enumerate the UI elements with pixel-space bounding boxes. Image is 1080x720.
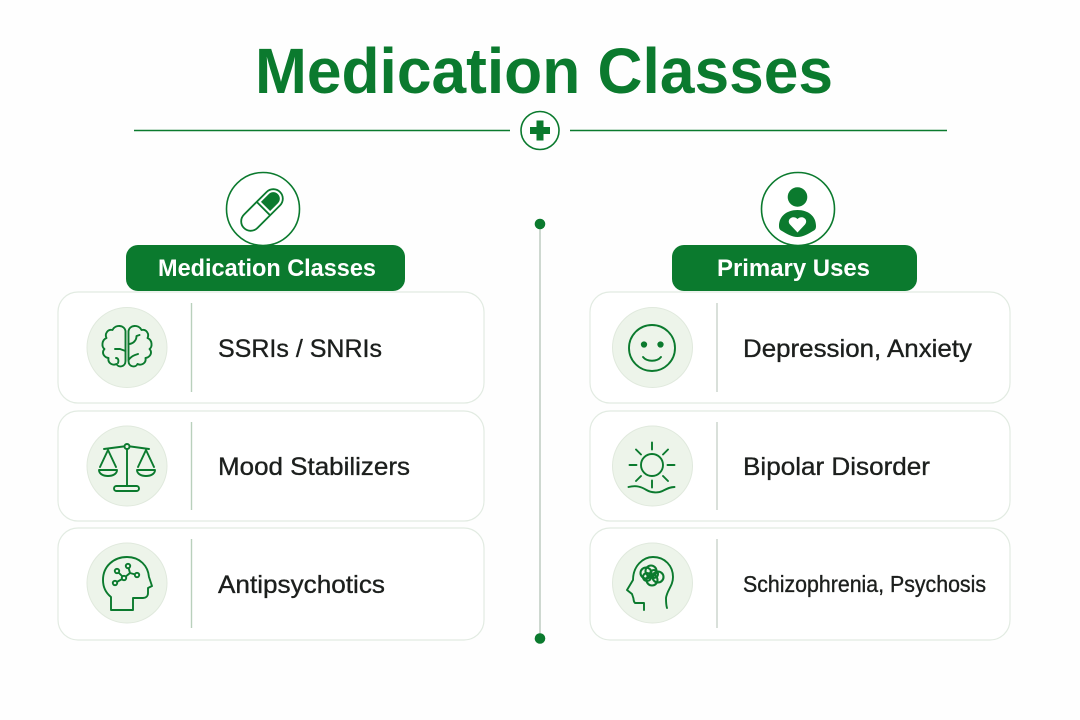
title: Medication Classes: [255, 35, 833, 107]
icon: scales: [99, 444, 155, 491]
icon: head with network: [103, 557, 152, 610]
title divider with plus badge: [134, 112, 947, 150]
panel: medication classes: [58, 172, 484, 640]
label: Mood Stabilizers: [218, 453, 410, 481]
label: Antipsychotics: [218, 571, 385, 599]
heading: medication classes: Medication Classes: [158, 255, 376, 282]
icon: capsule: [226, 172, 300, 246]
card: SSRIs / SNRIs: [58, 292, 484, 403]
card: depression, anxiety: [590, 292, 1010, 403]
panel: primary uses: [590, 172, 1010, 640]
icon: person with heart: [762, 172, 834, 246]
label: Bipolar Disorder: [743, 453, 930, 481]
icon: smiley face: [629, 325, 675, 371]
card: bipolar disorder: [590, 411, 1010, 521]
icon: head with tangled thoughts: [627, 557, 673, 610]
icon: brain: [102, 326, 152, 366]
central vertical connector: [535, 219, 545, 644]
card: mood stabilizers: [58, 411, 484, 521]
heading: primary uses: [672, 245, 917, 291]
label: Schizophrenia, Psychosis: [743, 571, 986, 597]
label: SSRIs / SNRIs: [218, 335, 382, 363]
label: Depression, Anxiety: [743, 335, 973, 363]
icon: sun over wave: [628, 442, 674, 492]
heading: medication classes: [126, 245, 405, 291]
heading: primary uses: Primary Uses: [717, 255, 870, 282]
card: schizophrenia, psychosis: [590, 528, 1010, 640]
card: antipsychotics: [58, 528, 484, 640]
